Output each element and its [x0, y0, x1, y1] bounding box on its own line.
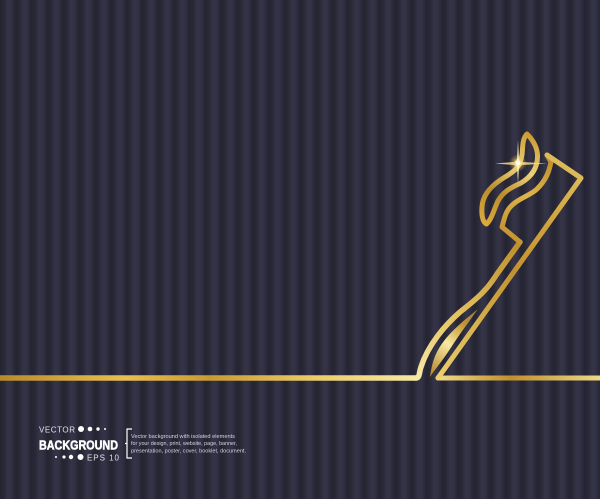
- left rising stroke lower flare: [416, 242, 520, 378]
- inner gold sliver: [430, 309, 478, 377]
- description text: Vector background with isolated elements: [131, 434, 235, 440]
- description text: for your design, print, website, page, banner,: [131, 441, 237, 447]
- description text: presentation, poster, cover, booklet, document.: [131, 448, 246, 454]
- horizontal gold line right: [438, 376, 600, 380]
- flame leaf outline: [482, 134, 538, 224]
- right rising stroke: [438, 155, 581, 378]
- description text: [131, 434, 246, 454]
- decorative dots top: [78, 426, 106, 432]
- sparkle: [495, 140, 547, 184]
- left rising stroke upper: [502, 155, 551, 242]
- VECTOR label: VECTOR: [39, 426, 75, 434]
- bracket: [125, 429, 132, 458]
- EPS 10 label: EPS 10: [87, 454, 120, 462]
- decorative dots bottom: [55, 454, 84, 460]
- horizontal gold line left: [0, 375, 416, 381]
- gold line illustration: [0, 134, 600, 378]
- logo: vector background eps 10: [39, 426, 246, 462]
- BACKGROUND label: BACKGROUND: [39, 438, 118, 452]
